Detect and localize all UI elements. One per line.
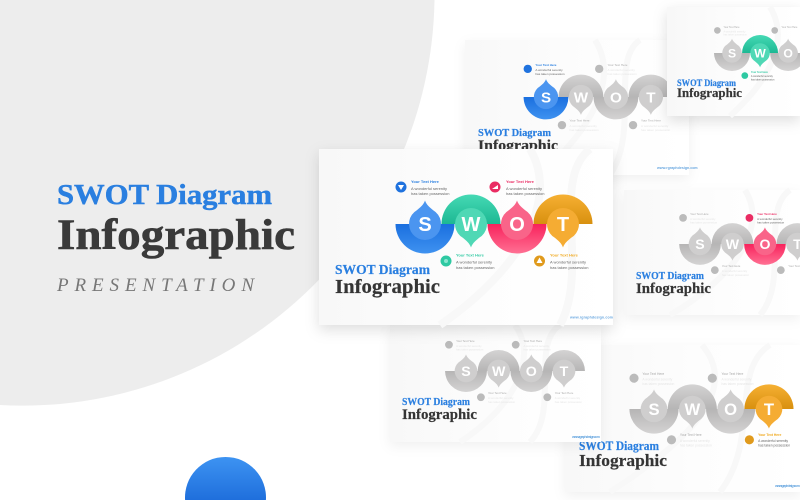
diagram: swot ribbon with T active: [629, 372, 794, 447]
segment T: T: [557, 214, 569, 236]
diagram: swot ribbon with S active: has taken possession: [608, 72, 637, 76]
diagram: swot ribbon with O active: Your Text Here: [757, 212, 777, 216]
slide heading: Infographic: [677, 85, 742, 100]
subtitle: presentation: PRESENTATION: [56, 275, 255, 296]
diagram: grey swot ribbon: Your Text Here: [555, 391, 574, 395]
diagram: swot ribbon with O active: A wonderful serenity: [722, 269, 748, 273]
slide: bottom left, all grey: [390, 325, 601, 442]
diagram: grey swot ribbon: has taken possession: [456, 347, 484, 351]
diagram: swot ribbon with W active: has taken possession: [723, 33, 748, 36]
diagram: swot ribbon with O active: A wonderful serenity: [690, 217, 716, 221]
diagram: grey swot ribbon: has taken possession: [488, 400, 516, 404]
diagram: swot ribbon with W active: A wonderful serenity: [751, 75, 774, 78]
diagram: swot ribbon with W active: A wonderful serenity: [723, 30, 746, 33]
slide heading: Infographic: [335, 276, 440, 298]
slide heading: Infographic: [636, 281, 712, 297]
diagram: swot ribbon with O active: O: [759, 236, 770, 252]
diagram: swot ribbon with W active: has taken possession: [751, 78, 775, 81]
diagram: swot ribbon with S active: has taken possession: [535, 72, 565, 76]
diagram: grey swot ribbon: A wonderful serenity: [488, 396, 514, 400]
diagram: swot ribbon with S active: O: [610, 89, 622, 106]
callout: strengths: A wonderful serenity: [411, 186, 447, 191]
footer url: www.rgraphdesign.com: [656, 166, 698, 170]
diagram: swot ribbon with W active: Your Text Here: [781, 26, 798, 29]
callout: threats: Your Text Here: [550, 252, 579, 258]
slide heading: SWOT Diagram: [677, 79, 736, 89]
callout: threats: A wonderful serenity: [550, 260, 586, 264]
diagram: swot ribbon with O active: S: [695, 236, 705, 252]
slide heading: SWOT Diagram: [579, 439, 660, 453]
diagram: swot ribbon with W active: O: [783, 46, 793, 60]
slide heading: SWOT Diagram: [402, 397, 470, 408]
diagram: swot ribbon with S active: A wonderful serenity: [608, 68, 635, 72]
slide: middle right, opportunities: [624, 190, 800, 315]
diagram: grey swot ribbon: O: [526, 364, 537, 380]
diagram: grey swot ribbon: A wonderful serenity: [456, 344, 482, 348]
diagram: swot ribbon with S active: [524, 63, 673, 132]
callout: opportunities: has taken possession: [506, 191, 544, 196]
callout: weaknesses: A wonderful serenity: [456, 260, 492, 264]
diagram: swot ribbon with T active: has taken possession: [721, 382, 754, 386]
diagram: swot ribbon with S active: A wonderful serenity: [535, 68, 563, 72]
diagram: swot ribbon with T active: has taken possession: [642, 382, 674, 386]
callout: strengths: [396, 179, 449, 196]
slide heading: Infographic: [478, 138, 558, 154]
diagram: grey swot ribbon: Your Text Here: [488, 391, 507, 395]
diagram: grey swot ribbon: S: [461, 364, 471, 380]
diagram: swot ribbon with T active: Your Text Here: [758, 433, 781, 437]
diagram: swot ribbon with T active: T: [764, 400, 774, 419]
blue circle: [185, 457, 266, 500]
diagram: swot ribbon with S active: W: [574, 89, 589, 106]
diagram: swot ribbon with T active: A wonderful serenity: [721, 378, 752, 382]
diagram: grey swot ribbon: [445, 339, 585, 404]
slide heading: SWOT Diagram: [478, 127, 551, 139]
diagram: swot ribbon with W active: Your Text Here: [723, 26, 740, 29]
slide: top left, strengths: [465, 40, 698, 175]
diagram: swot ribbon with O active: Your Text Here: [722, 264, 741, 268]
title: SWOT Diagram: SWOT Diagram: [57, 179, 272, 211]
diagram: swot ribbon with O active: has taken possession: [690, 221, 718, 225]
slide: main, all colored: [319, 149, 613, 325]
callout: opportunities: Your Text Here: [506, 179, 535, 184]
title: Infographic: Infographic: [57, 212, 295, 259]
diagram: swot ribbon with O active: [679, 212, 800, 277]
diagram: swot ribbon with T active: Your Text Here: [642, 372, 664, 376]
callout: weaknesses: has taken possession: [456, 265, 494, 270]
diagram: swot ribbon with T active: W: [684, 400, 700, 419]
segment S: S: [418, 214, 432, 236]
diagram: swot ribbon with S active: Your Text Here: [570, 119, 590, 123]
diagram: swot ribbon with S active: Your Text Here: [641, 119, 661, 123]
diagram: swot ribbon with T active: Your Text Here: [721, 372, 743, 376]
callout: opportunities: A wonderful serenity: [506, 186, 542, 191]
diagram: swot ribbon with T active: has taken possession: [680, 443, 712, 447]
diagram: swot ribbon with O active: Your Text Here: [690, 212, 709, 216]
diagram: grey swot ribbon: has taken possession: [524, 347, 551, 351]
slide heading: [402, 397, 478, 423]
segment O: O: [509, 214, 525, 236]
segment W: W: [462, 214, 481, 236]
slide heading: [579, 439, 667, 470]
diagram: swot ribbon with S active: has taken possession: [641, 128, 670, 132]
slide: bottom right, threats: [565, 345, 800, 492]
segment O: [488, 200, 546, 254]
diagram: swot ribbon with S active: Your Text Here: [535, 63, 557, 67]
segment W: [442, 194, 500, 248]
slide heading: [335, 263, 440, 298]
callout: weaknesses: [440, 252, 494, 270]
diagram: swot ribbon with T active: A wonderful serenity: [642, 378, 673, 382]
callout: threats: has taken possession: [550, 265, 588, 270]
diagram: swot ribbon with W active: S: [728, 46, 736, 60]
diagram: grey swot ribbon: Your Text Here: [456, 339, 475, 343]
diagram: swot ribbon with S active: has taken possession: [570, 128, 599, 132]
diagram: swot ribbon with O active: A wonderful serenity: [757, 217, 783, 221]
footer url: www.rgraphdesign.com: [569, 316, 613, 320]
diagram: grey swot ribbon: has taken possession: [555, 400, 582, 404]
diagram: swot ribbon with T active: S: [648, 400, 660, 419]
slide heading: [478, 127, 558, 154]
background circle: [0, 0, 434, 406]
diagram: swot ribbon with S active: A wonderful serenity: [570, 124, 597, 128]
slide heading: [636, 271, 712, 297]
diagram: swot ribbon with T active: A wonderful serenity: [680, 439, 710, 443]
slide heading: Infographic: [579, 451, 667, 470]
callout: weaknesses: Your Text Here: [456, 252, 485, 258]
footer url: www.rgraphdesign.com: [571, 435, 600, 439]
diagram: swot ribbon with O active: W: [726, 236, 740, 252]
diagram: grey swot ribbon: Your Text Here: [524, 339, 542, 343]
slide: top right, weaknesses: [667, 7, 800, 116]
diagram: swot ribbon with W active: Your Text Here: [751, 71, 769, 74]
diagram: swot ribbon with S active: Your Text Here: [608, 63, 628, 67]
diagram: swot ribbon with S active: S: [541, 89, 551, 106]
diagram: grey swot ribbon: T: [560, 364, 569, 380]
slide heading: SWOT Diagram: [335, 263, 430, 278]
diagram: grey swot ribbon: W: [492, 364, 506, 380]
diagram: swot ribbon with T active: O: [724, 400, 737, 419]
diagram: swot ribbon with O active: has taken possession: [757, 221, 785, 225]
diagram: swot ribbon with W active: W: [754, 46, 766, 60]
diagram: grey swot ribbon: A wonderful serenity: [555, 396, 581, 400]
footer url: www.rgraphdesign.com: [774, 484, 800, 488]
diagram: swot ribbon with T active: Your Text Here: [680, 433, 702, 437]
segment S: [396, 200, 454, 254]
slide heading: SWOT Diagram: [636, 271, 704, 282]
callout: opportunities: [490, 179, 544, 196]
diagram: swot ribbon with T active: has taken possession: [758, 443, 790, 447]
diagram: swot ribbon with W active: [714, 26, 800, 81]
segment T: [534, 194, 592, 248]
diagram: swot ribbon with O active: Your Text: [788, 264, 800, 268]
diagram: swot ribbon with S active: T: [646, 89, 656, 106]
slide heading: Infographic: [402, 407, 478, 423]
diagram: swot ribbon with S active: A wonderful serenity: [641, 124, 669, 128]
callout: strengths: has taken possession: [411, 191, 449, 196]
callout: strengths: Your Text Here: [411, 179, 440, 184]
diagram: swot ribbon with O active: has taken possession: [722, 273, 749, 277]
diagram: swot ribbon with T active: A wonderful serenity: [758, 439, 788, 443]
callout: threats: [534, 252, 588, 270]
diagram: grey swot ribbon: A wonderful serenity: [524, 344, 550, 348]
diagram: colored swot ribbon: [396, 179, 592, 270]
